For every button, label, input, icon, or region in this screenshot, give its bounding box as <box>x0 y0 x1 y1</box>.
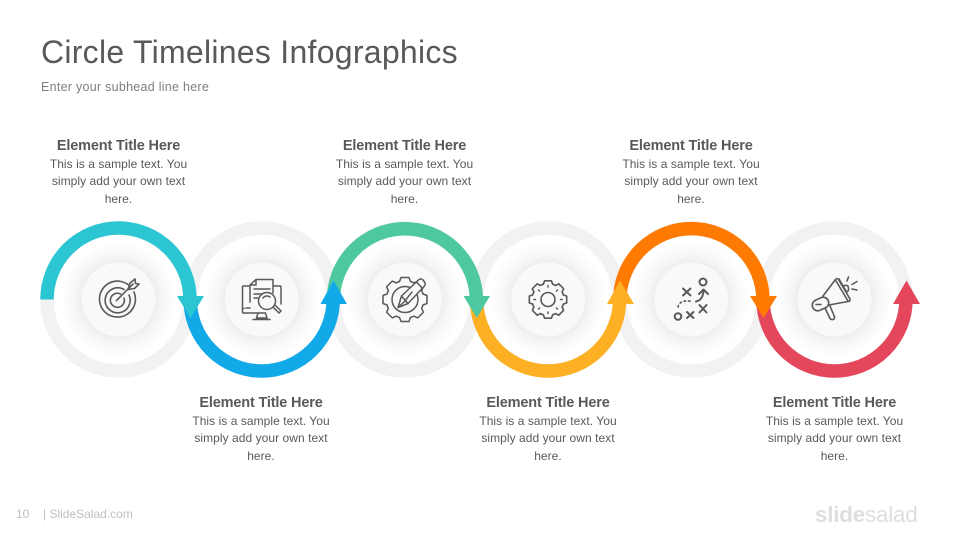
title: Circle Timelines Infographics <box>41 34 458 70</box>
arrow 4: gold <box>477 280 634 371</box>
text block 6 <box>766 395 903 463</box>
text block 2: here. <box>247 449 275 463</box>
text block 6: This is a sample text. You <box>766 414 903 428</box>
logo wordmark: slidesalad <box>815 502 918 527</box>
text block 6: simply add your own text <box>768 431 901 445</box>
text block 1: Element Title Here <box>57 138 180 154</box>
gray rings <box>47 228 906 371</box>
text block 1 <box>50 138 187 206</box>
text block 3: Element Title Here <box>343 138 466 154</box>
arrow 5: orange <box>620 229 777 318</box>
text block 4: This is a sample text. You <box>479 414 617 428</box>
text block 1: here. <box>105 192 132 206</box>
icon: game plan <box>675 278 708 320</box>
text block 5: Element Title Here <box>629 138 753 154</box>
text block 2: This is a sample text. You <box>192 414 330 428</box>
text block 4: here. <box>534 449 562 463</box>
footer brand text: | SlideSalad.com <box>43 507 133 521</box>
text block 3 <box>336 138 473 206</box>
icon: target <box>99 279 139 317</box>
arrow 2: blue <box>190 280 347 371</box>
icon: megaphone <box>810 277 857 320</box>
text block 1: simply add your own text <box>52 174 185 188</box>
text block 3: here. <box>391 192 418 206</box>
text block 5 <box>622 138 760 206</box>
text block 6: here. <box>821 449 848 463</box>
text block 4: Element Title Here <box>486 395 610 411</box>
icon: gear <box>529 281 567 318</box>
text block 5: simply add your own text <box>624 174 758 188</box>
arrow 6: red <box>763 280 920 371</box>
icon: document search <box>242 280 281 320</box>
text block 3: This is a sample text. You <box>336 157 473 171</box>
text block 4: simply add your own text <box>481 431 615 445</box>
page number: 10 <box>16 507 29 521</box>
text block 6: Element Title Here <box>773 395 896 411</box>
text block 2 <box>192 395 330 463</box>
text block 5: here. <box>677 192 705 206</box>
text block 1: This is a sample text. You <box>50 157 187 171</box>
text block 2: simply add your own text <box>194 431 328 445</box>
text block 3: simply add your own text <box>338 174 471 188</box>
text block 5: This is a sample text. You <box>622 157 760 171</box>
subhead: Enter your subhead line here <box>41 80 209 94</box>
text block 4 <box>479 395 617 463</box>
arrow 1: cyan <box>47 228 204 318</box>
center discs <box>60 242 892 358</box>
text block 2: Element Title Here <box>199 395 323 411</box>
icon: gear with pencil <box>383 278 427 322</box>
arrow 3: green <box>333 229 490 318</box>
